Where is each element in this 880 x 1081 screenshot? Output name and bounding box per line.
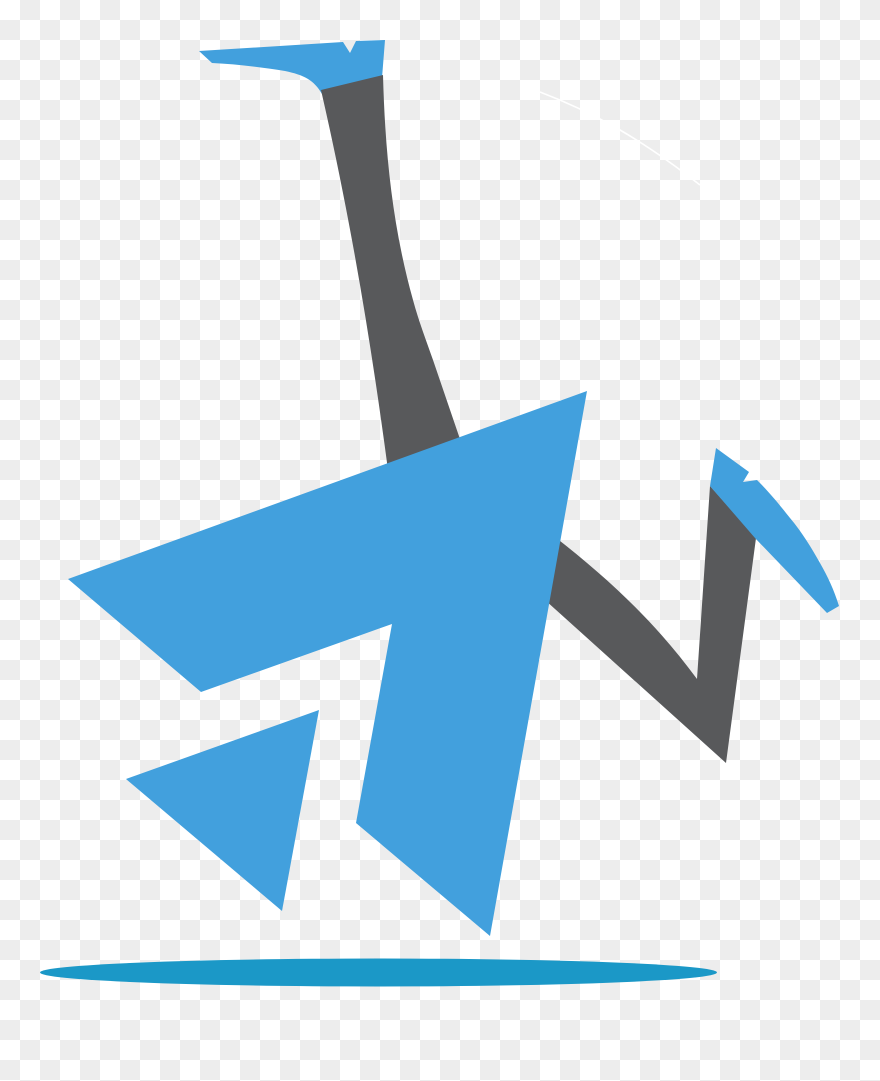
upper foot bbox=[199, 40, 385, 94]
lower foot bbox=[710, 448, 839, 613]
arrow body bbox=[68, 391, 587, 936]
ground shadow ellipse bbox=[40, 958, 717, 986]
upper leg bbox=[321, 75, 462, 470]
faint white arc bbox=[540, 92, 700, 185]
lower leg bbox=[545, 486, 756, 763]
small triangle bbox=[126, 710, 319, 911]
